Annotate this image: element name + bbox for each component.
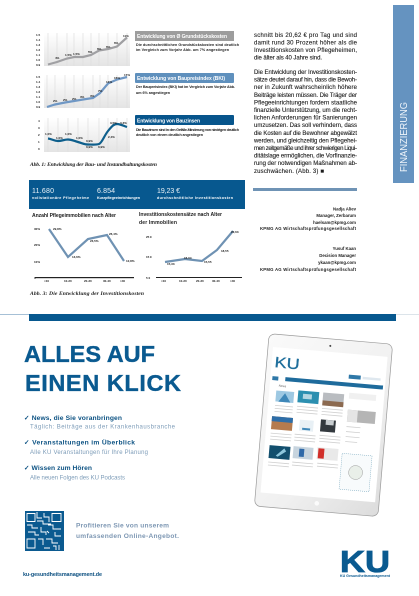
callout: Bauzinsen: Die Bauzinsen sind in den Gefälle-Minderung von niedrigen deutlich: [136, 128, 240, 132]
callout: Grundstückskosten: Entwicklung von Ø Grundstückskosten: [137, 34, 227, 40]
text block: Fließtext: rung der notwendigen Maßnahmen ab-: [254, 161, 357, 167]
benefit: Wissen zum Hören: Alle neuen Folgen des KU Podcasts: [30, 476, 125, 482]
benefit: News: [24, 415, 176, 430]
benefit: News: Täglich: Beiträge aus der Krankenhausbranche: [30, 424, 176, 430]
panel: Kennzahlen: 6.854: [97, 188, 115, 195]
chart: Anzahl Pflegeimmobilien nach Alter: 30-40: [103, 279, 111, 283]
callout: Baupreisindex: Der Baupreisindex (BKI) hat im Vergleich zum Vorjahr Abb.: [136, 85, 235, 89]
text block: Fließtext: Investitionskosten von Pflegeheimen,: [254, 48, 357, 54]
chart: Bauzinsen: 1,0%: [65, 132, 72, 136]
benefit: Veranstaltungen: Alle KU Veranstaltungen für Ihre Planung: [30, 450, 148, 456]
chart: Baupreisindex: 2%: [53, 99, 58, 103]
chart: Anzahl Pflegeimmobilien nach Alter: 10-20: [64, 279, 72, 283]
chart: Investitionskostensätze nach Alter der Immobilien: Investitionskostensätze nach Alter: [139, 212, 222, 218]
caption: Abb. 3: Abb. 3: Die Entwicklung der Investitionskosten: [29, 291, 144, 297]
caption: Abb. 1: Abb. 1: Entwicklung der Bau- und Instandhaltungskosten: [29, 162, 157, 168]
text block: Kontakt 1: Nadja Aliev: [333, 206, 357, 212]
chart: Baupreisindex: 2%: [72, 97, 77, 101]
benefit: Veranstaltungen: ✓ Veranstaltungen im Überblick: [24, 438, 135, 446]
chart: Grundstückskosten: 6%: [114, 41, 119, 45]
benefit: Wissen zum Hören: [24, 465, 125, 482]
chart: Grundstückskosten: 1.3: [36, 43, 41, 47]
chart: Grundstückskosten: 5%: [88, 50, 93, 54]
chart: Anzahl Pflegeimmobilien nach Alter: 13,6%: [72, 255, 81, 259]
chart: Baupreisindex: 1.5: [36, 75, 41, 79]
chart: Bauzinsen: 3,5%: [110, 121, 117, 125]
chart: Baupreisindex: [36, 73, 130, 109]
chart: Investitionskostensätze nach Alter der Immobilien: 15,55: [204, 260, 212, 264]
text block: Kontakt 2: Yusuf Kaan: [333, 246, 356, 251]
chart: Investitionskostensätze nach Alter der Immobilien: 25 €: [146, 235, 152, 239]
chart: Bauzinsen: 2: [38, 133, 40, 137]
callout: Bauzinsen: deutlich von einem deutlich angestiegen: [136, 133, 204, 137]
chart: Investitionskostensätze nach Alter der Immobilien: 20-30: [196, 279, 204, 283]
text block: Fließtext: Pflegeeinrichtungen fordern staatliche: [254, 100, 358, 106]
chart: Anzahl Pflegeimmobilien nach Alter: 29,8%: [53, 227, 62, 231]
text block: Fließtext: Die Entwicklung der Investitionskosten-: [254, 70, 357, 76]
text block: Kontakt 1: KPMG AG Wirtschaftsprüfungsgesellschaft: [260, 226, 357, 231]
chart: Baupreisindex: 2%: [63, 98, 68, 102]
heading: Alles auf einen Klick: EINEN KLICK: [25, 370, 181, 396]
chart: Baupreisindex: 1.3: [36, 85, 41, 89]
callout: Grundstückskosten: [135, 31, 240, 52]
chart: Grundstückskosten: 6%: [97, 47, 102, 51]
callout: Baupreisindex: Entwicklung von Baupreisindex (BKI): [137, 76, 225, 82]
panel: Kennzahlen: 19,23 €: [157, 188, 180, 195]
text block: Fließtext: die älter als 40 Jahre sind.: [254, 56, 322, 62]
chart: Anzahl Pflegeimmobilien nach Alter: 10%: [34, 260, 40, 264]
text block: Kontakt 2: ykaan@kpmg.com: [318, 260, 356, 265]
callout: Baupreisindex: [135, 73, 235, 95]
text block: Fließtext: damit rund 30 Prozent höher als die: [254, 40, 358, 46]
text block: Kontakt 2: KPMG AG Wirtschaftsprüfungsgesellschaft: [260, 267, 357, 272]
benefit: News: ✓ News, die Sie voranbringen: [24, 415, 122, 422]
text block: Kontakt 2: Decision Manager: [319, 253, 356, 258]
text block: Fließtext: umzusetzen. Das soll verhindern, dass: [254, 123, 357, 129]
panel: Kennzahlen: Kurzpflegeeinrichtungen: [97, 196, 141, 200]
text block: Fließtext: men zeitgemäße und ihrer schwierigen Liqui-: [254, 146, 357, 152]
chart: Grundstückskosten: 4%: [55, 56, 60, 60]
chart: Anzahl Pflegeimmobilien nach Alter: 23,5%: [90, 239, 99, 243]
chart: Grundstückskosten: 0.9: [36, 63, 41, 67]
tablet screen: [261, 347, 388, 502]
chart: Anzahl Pflegeimmobilien nach Alter: 12,8%: [126, 259, 135, 263]
chart: Baupreisindex: 7%: [98, 89, 103, 93]
text block: Fließtext: werden, und gleichzeitig den Pflegehei-: [253, 138, 357, 144]
benefit: Wissen zum Hören: ✓ Wissen zum Hören: [24, 465, 92, 472]
text block: Kontakt 2: [260, 246, 357, 272]
chart: Bauzinsen: 3: [38, 126, 40, 130]
tablet screen: KU: [274, 354, 300, 373]
text block: QR-Hinweis: Profitieren Sie von unserem: [76, 522, 169, 530]
chart: Bauzinsen: 0,9%: [98, 145, 105, 149]
chart: Baupreisindex: 17%: [124, 73, 130, 77]
chart: Investitionskostensätze nach Alter der Immobilien: 30-40: [212, 279, 220, 283]
text block: Fließtext: Beiträge leisten müssen. Die Träger der: [254, 93, 357, 99]
chart: Anzahl Pflegeimmobilien nach Alter: [32, 213, 135, 283]
chart: Baupreisindex: 14%: [106, 80, 112, 84]
chart: Anzahl Pflegeimmobilien nach Alter: 0: [34, 276, 36, 280]
panel: Kennzahlen: vollstationäre Pflegeheime: [32, 196, 89, 200]
chart: Anzahl Pflegeimmobilien nach Alter: >40: [120, 279, 125, 283]
chart: Bauzinsen: 1,0%: [45, 132, 52, 136]
chart: Investitionskostensätze nach Alter der Immobilien: 10-20: [179, 279, 187, 283]
chart: Bauzinsen: 0: [38, 147, 40, 151]
chart: Investitionskostensätze nach Alter der Immobilien: <10: [161, 279, 166, 283]
chart: Investitionskostensätze nach Alter der Immobilien: 15,33: [167, 262, 175, 266]
chart: Grundstückskosten: 1,5%: [65, 53, 72, 57]
illustration: tablet: [254, 334, 393, 517]
text: URL: ku-gesundheitsmanagement.de: [23, 572, 102, 578]
divider bar: Kontakt: [253, 188, 357, 191]
text block: Fließtext: die Kosten auf die Bewohner abgewälzt: [254, 131, 357, 137]
text block: Kontakt 1: haelsam@kpmg.com: [313, 220, 356, 225]
footer band: [0, 314, 419, 321]
chart: Baupreisindex: 1.0: [36, 100, 41, 104]
text block: Kontakt 1: [260, 206, 357, 231]
chart: Grundstückskosten: 1.0: [36, 58, 41, 62]
chart: Grundstückskosten: [36, 33, 130, 67]
chart: Investitionskostensätze nach Alter der Immobilien: 16,04: [184, 256, 192, 260]
text block: Fließtext: zuschwächen. (Abb. 3) ■: [254, 169, 324, 175]
chart: Investitionskostensätze nach Alter der Immobilien: der Immobilien: [139, 220, 177, 226]
logo: KU: KU: [340, 544, 390, 579]
chart: Investitionskostensätze nach Alter der Immobilien: 18,55: [221, 249, 229, 253]
sidebar: Finanzierung: [393, 5, 414, 183]
chart: Investitionskostensätze nach Alter der Immobilien: 5 €: [146, 276, 151, 280]
text block: Fließtext: [253, 33, 358, 175]
logo: KU: KU Gesundheitsmanagement: [340, 574, 391, 578]
chart: Investitionskostensätze nach Alter der Immobilien: [139, 212, 242, 283]
callout: Grundstückskosten: Die durchschnittlichen Grundstückskosten sind deutlich: [136, 43, 240, 47]
chart: Grundstückskosten: 6%: [106, 45, 111, 49]
tablet thumbnails: [266, 386, 377, 492]
callout: Grundstückskosten: im Vergleich zum Vorjahr Abb. um 7% angestiegen: [136, 48, 230, 52]
chart: Bauzinsen: 1,0%: [76, 136, 83, 140]
chart: Baupreisindex: 3%: [90, 94, 95, 98]
chart: Bauzinsen: 4: [38, 119, 40, 123]
chart: Anzahl Pflegeimmobilien nach Alter: <10: [44, 279, 49, 283]
sidebar: Finanzierung: FINANZIERUNG: [398, 102, 410, 172]
icon: QR code: [25, 511, 64, 551]
chart: Anzahl Pflegeimmobilien nach Alter: 20-30: [84, 279, 92, 283]
chart: Bauzinsen: 3,3%: [120, 121, 127, 125]
chart: Baupreisindex: 0.9: [36, 105, 41, 109]
chart: Bauzinsen: 0,9%: [86, 139, 93, 143]
chart: Investitionskostensätze nach Alter der Immobilien: 15 €: [146, 255, 152, 259]
chart: Baupreisindex: 1.2: [36, 90, 41, 94]
text block: QR-Hinweis: umfassenden Online-Angebot.: [76, 533, 179, 540]
text block: Kontakt 1: Manager, Zerbarum: [316, 213, 356, 218]
heading: Alles auf einen Klick: ALLES AUF: [24, 341, 155, 367]
chart: Baupreisindex: 1.1: [36, 95, 41, 99]
chart: Grundstückskosten: 1.2: [36, 48, 41, 52]
chart: Grundstückskosten: 1.5: [36, 33, 41, 37]
text block: Fließtext: sätze deutet darauf hin, dass die Bewoh-: [254, 78, 357, 84]
callout: Baupreisindex: um 6% angestiegen: [136, 91, 171, 95]
tablet screen: News: [279, 384, 287, 388]
text block: Fließtext: schnitt bis 20,62 € pro Tag und sind: [254, 33, 357, 39]
chart: Anzahl Pflegeimmobilien nach Alter: Anzahl Pflegeimmobilien nach Alter: [32, 213, 116, 219]
text block: Fließtext: lichen Anforderungen für Sanierungen: [254, 116, 357, 122]
callout: Bauzinsen: Entwicklung von Bauzinsen: [137, 118, 200, 124]
chart: Grundstückskosten: 1.4: [36, 38, 41, 42]
chart: Grundstückskosten: 1,5%: [73, 52, 80, 56]
text block: QR-Hinweis: [76, 522, 179, 540]
chart: Bauzinsen: [38, 118, 130, 152]
chart: Grundstückskosten: 11%: [123, 34, 129, 38]
callout: Bauzinsen: [135, 115, 240, 137]
benefit: Veranstaltungen: [24, 438, 148, 456]
text block: Fließtext: finanzielle Unterstützung, um die recht-: [254, 108, 357, 114]
chart: Investitionskostensätze nach Alter der Immobilien: 20,63: [231, 230, 239, 234]
chart: Anzahl Pflegeimmobilien nach Alter: 30%: [34, 227, 40, 231]
chart: Baupreisindex: 1.4: [36, 80, 41, 84]
chart: Bauzinsen: 0,9%: [86, 145, 93, 149]
panel: Kennzahlen: [29, 180, 245, 209]
chart: Anzahl Pflegeimmobilien nach Alter: 26,4%: [109, 232, 118, 236]
chart: Bauzinsen: 2,4%: [108, 135, 115, 139]
panel: Kennzahlen: durchschnittliche Investitionskosten: [157, 196, 234, 200]
panel: Kennzahlen: 11.680: [32, 188, 54, 195]
heading: Alles auf einen Klick: [24, 341, 181, 396]
chart: Anzahl Pflegeimmobilien nach Alter: 20%: [34, 243, 40, 247]
chart: Bauzinsen: 1: [38, 140, 40, 144]
chart: Baupreisindex: 3%: [80, 95, 85, 99]
text block: Fließtext: ner in Zukunft wahrscheinlich höhere: [254, 85, 358, 91]
text block: Fließtext: ditätslage ermöglichen, die Vorfinanzie-: [254, 154, 357, 160]
chart: Grundstückskosten: 1.1: [36, 53, 41, 57]
chart: Bauzinsen: 1,0%: [56, 136, 63, 140]
chart: Investitionskostensätze nach Alter der Immobilien: >40: [230, 279, 235, 283]
chart: Baupreisindex: 16%: [114, 76, 120, 80]
